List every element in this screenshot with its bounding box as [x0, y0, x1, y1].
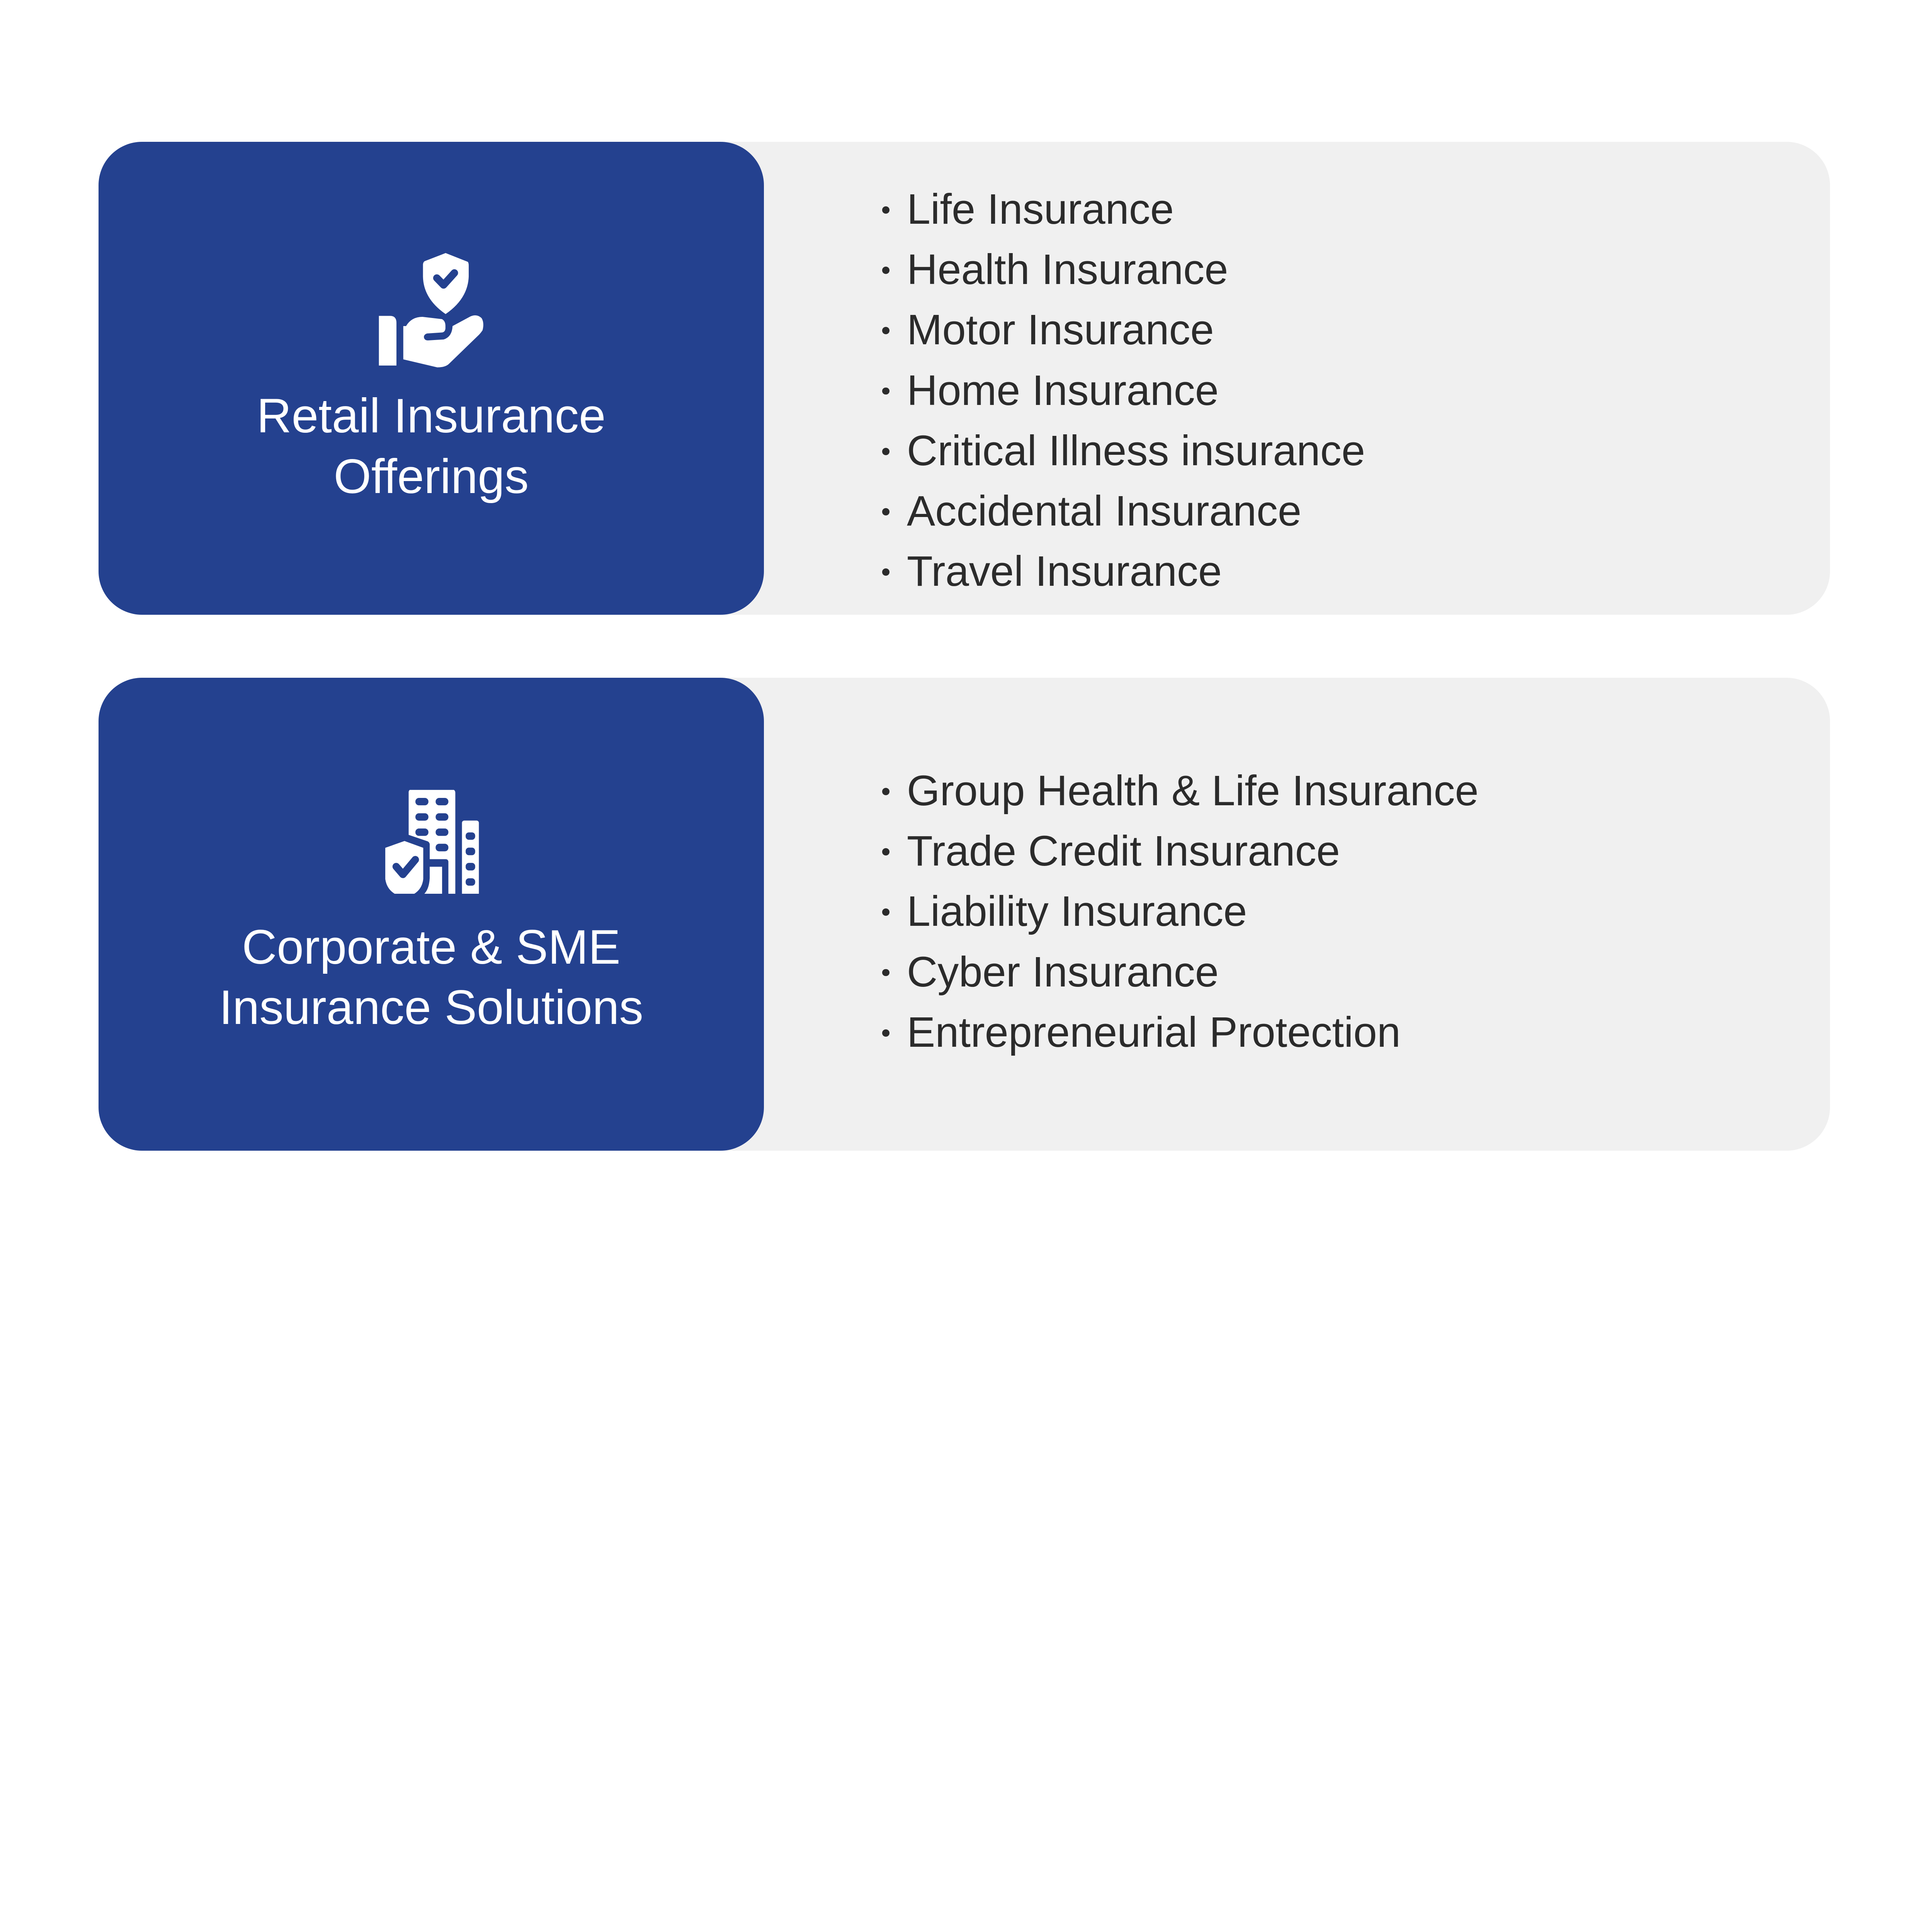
title: corporate: Corporate & SME: [242, 920, 621, 974]
list: retail items: Accidental Insurance: [907, 487, 1301, 535]
list: corporate items: Trade Credit Insurance: [907, 827, 1340, 875]
list: corporate items: Entrepreneurial Protection: [907, 1009, 1401, 1056]
list: corporate items: Cyber Insurance: [907, 948, 1219, 995]
list: retail items: Life Insurance: [907, 185, 1174, 233]
list: retail items: Motor Insurance: [907, 306, 1214, 354]
panel: corporate header: [99, 678, 764, 1151]
title: retail: Retail Insurance: [257, 389, 606, 443]
title: retail: Offerings: [333, 450, 529, 503]
icon: buildings with shield: [362, 773, 507, 893]
list: retail items: Critical Illness insurance: [907, 427, 1365, 474]
icon: hand with shield: [362, 242, 507, 374]
list: corporate items: Liability Insurance: [907, 888, 1247, 935]
title: corporate: Insurance Solutions: [219, 981, 643, 1034]
list: retail items: [907, 179, 1365, 602]
panel: retail background: [99, 142, 1830, 615]
panel: retail header: [99, 142, 764, 615]
list: corporate items: [907, 761, 1479, 1063]
list: retail items: Travel Insurance: [907, 548, 1222, 595]
list: retail items: Home Insurance: [907, 366, 1219, 414]
panel: corporate background: [99, 678, 1830, 1151]
list: retail items: Health Insurance: [907, 246, 1228, 293]
title: corporate: [99, 917, 764, 1038]
title: retail: [99, 386, 764, 507]
list: corporate items: Group Health & Life Insurance: [907, 767, 1479, 815]
